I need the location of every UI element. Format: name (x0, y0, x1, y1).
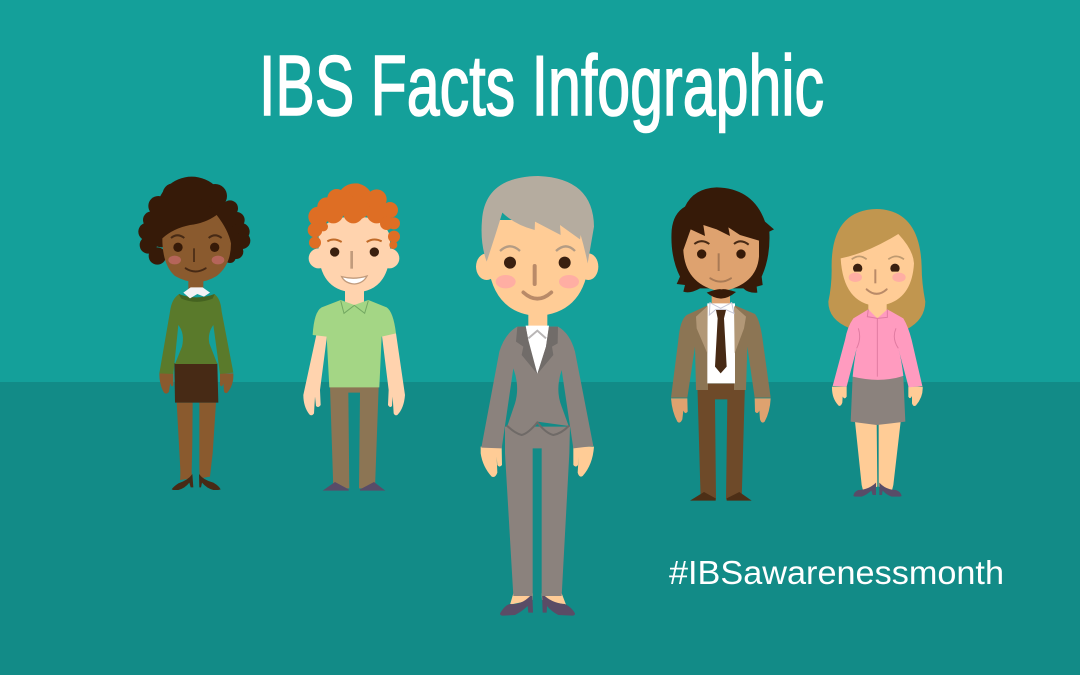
figure: man with beard and brown suit (671, 187, 774, 501)
figure: man with orange hair (303, 183, 405, 491)
figure: woman in green sweater (138, 177, 250, 490)
background floor (0, 382, 1080, 675)
title: IBS Facts Infographic (259, 39, 824, 134)
hashtag: #IBSawarenessmonth (669, 554, 1004, 591)
hair (138, 177, 250, 265)
figure: blonde woman in pink blouse (828, 209, 925, 497)
background wall (0, 0, 1080, 382)
figure: central woman in grey suit (476, 176, 598, 616)
